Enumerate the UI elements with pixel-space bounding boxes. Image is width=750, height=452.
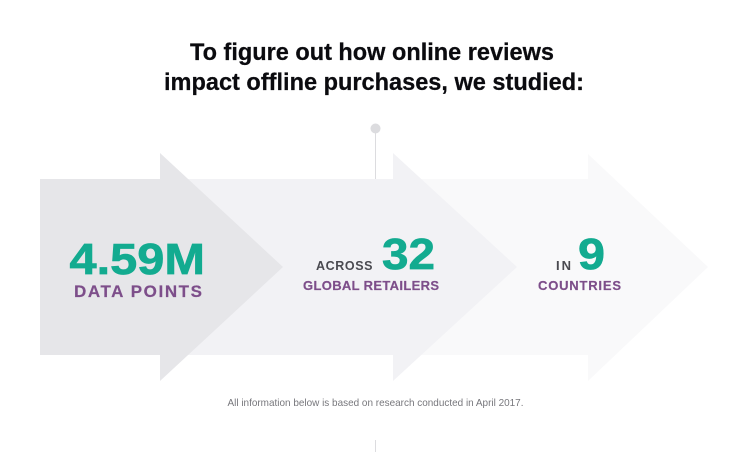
stat: 4.59M data points (70, 235, 205, 301)
title: impact offline purchases, we studied: (164, 69, 584, 96)
stat: in 9 countries: IN (556, 258, 571, 273)
connector bottom (375, 440, 376, 452)
stat: across 32 global retailers: 32 (382, 230, 435, 279)
stat: across 32 global retailers (303, 230, 439, 293)
stat: across 32 global retailers: ACROSS (316, 259, 372, 273)
stat: in 9 countries: COUNTRIES (538, 278, 621, 293)
arrow 2 (160, 153, 517, 381)
title (164, 39, 584, 96)
stat: 4.59M data points: 4.59M (70, 235, 205, 284)
stat: in 9 countries: 9 (578, 230, 605, 279)
arrow 3 (393, 154, 708, 381)
title: To figure out how online reviews (190, 39, 554, 66)
footnote: All information below is based on research conducted in April 2017. (228, 397, 524, 409)
connector top (370, 124, 380, 179)
stat: in 9 countries (538, 230, 621, 293)
stat: 4.59M data points: DATA POINTS (74, 282, 202, 301)
arrow 1 (40, 153, 283, 381)
stat: across 32 global retailers: GLOBAL RETAILERS (303, 278, 439, 293)
